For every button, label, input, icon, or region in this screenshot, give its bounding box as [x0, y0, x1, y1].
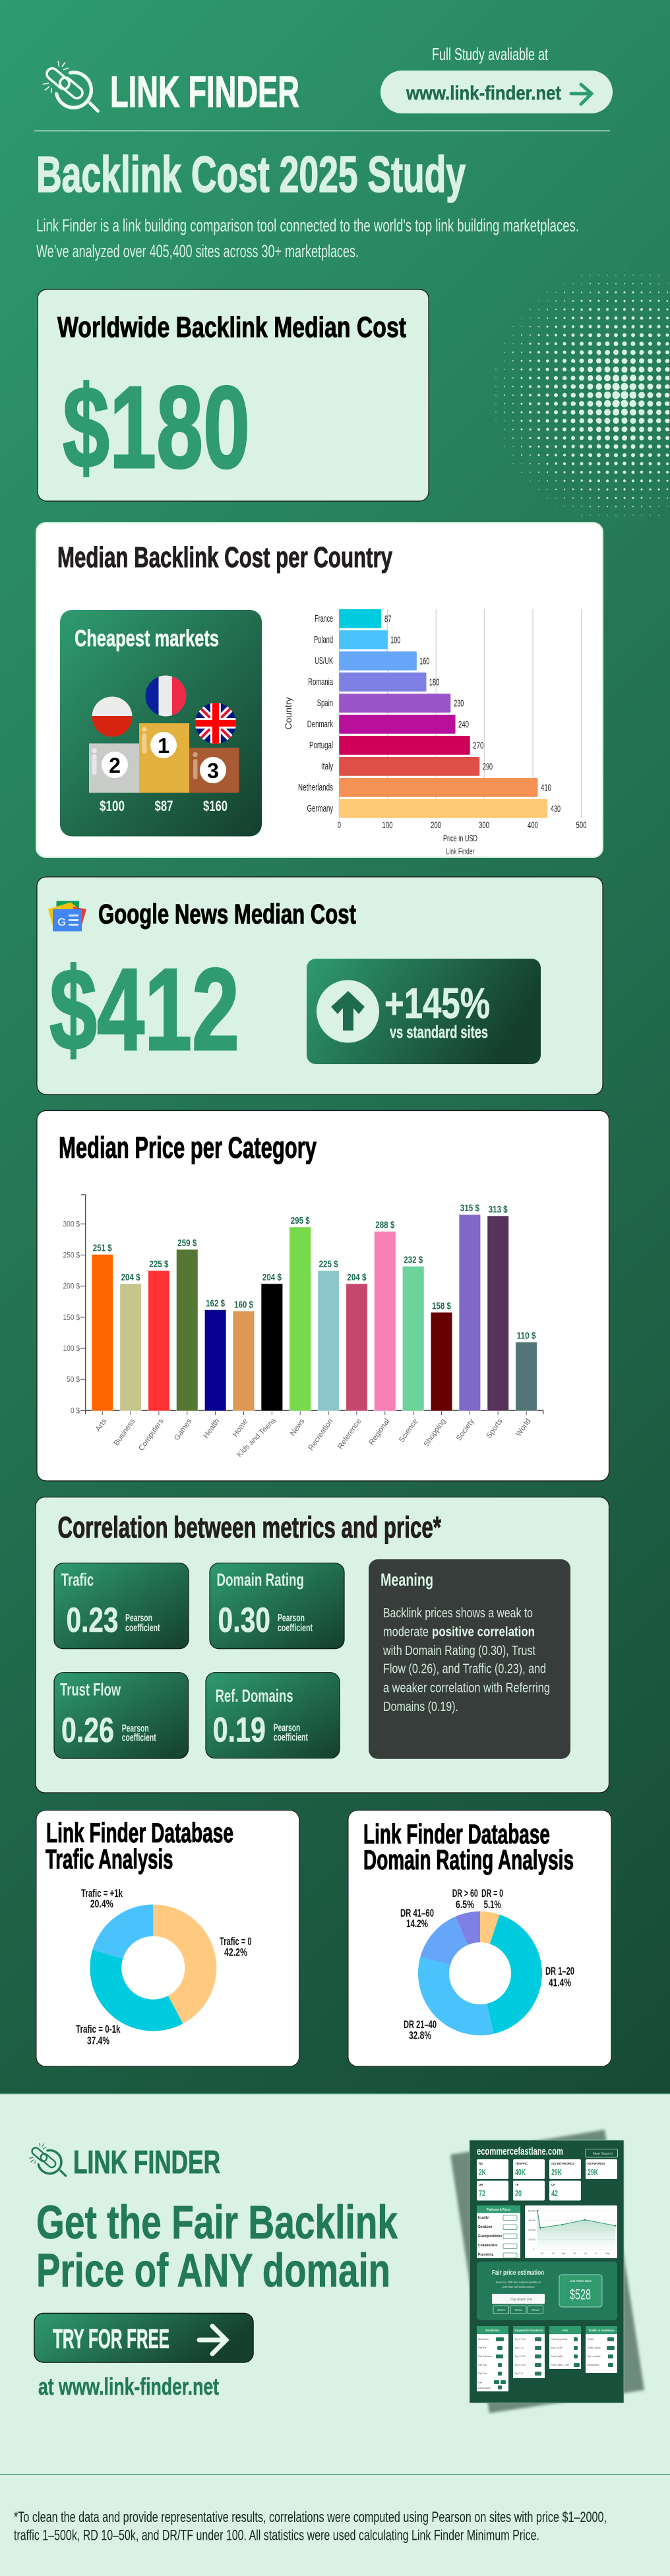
value labels: 160: [419, 655, 429, 667]
traffic line chart: 45,000: [528, 2219, 535, 2222]
value labels: 315 $: [460, 1203, 479, 1214]
button: try for free: TRY FOR FREE: [53, 2323, 169, 2354]
traffic line chart: 30,000: [528, 2229, 535, 2231]
bars: [92, 1214, 537, 1411]
donut labels: 20.4%: [90, 1898, 113, 1910]
big number: $180: [63, 362, 250, 493]
fair price estimation: Based on +100K sites analyzed available on: [496, 2281, 541, 2284]
explanation text: a weaker correlation with Referring: [383, 1681, 550, 1696]
bar chart: price per category: [63, 1195, 543, 1459]
platforms table: [477, 2205, 520, 2258]
metric card: ref domains: [206, 1673, 340, 1758]
traffic line chart: 60,000: [528, 2210, 535, 2213]
metric cards: CF: [551, 2183, 555, 2186]
y axis labels: 50 $: [67, 1375, 80, 1384]
y axis labels: 200 $: [63, 1282, 80, 1291]
explanation text: Flow (0.26), and Traffic (0.23), and: [383, 1662, 546, 1677]
category labels: Shopping: [423, 1418, 447, 1449]
x axis ticks: 0: [338, 820, 341, 830]
metric cards: 29K: [588, 2167, 598, 2177]
heading: Domain Rating Analysis: [363, 1844, 574, 1875]
y axis labels: 250 $: [63, 1250, 80, 1259]
search button: [586, 2149, 617, 2157]
country labels: [298, 613, 334, 814]
platforms table: Platforms & Prices: [487, 2208, 510, 2212]
traffic line chart: 24: [595, 2252, 597, 2255]
country labels: Poland: [314, 634, 333, 645]
platforms table: Icopify: [478, 2216, 489, 2220]
value labels: 251 $: [93, 1242, 112, 1254]
panel: median cost per country: [36, 523, 603, 857]
category labels: Games: [173, 1418, 194, 1442]
fair price estimation: Tweet: [514, 2308, 523, 2312]
value labels: 110 $: [517, 1331, 536, 1341]
donut labels: 6.5%: [456, 1898, 474, 1911]
country labels: Denmark: [307, 719, 333, 730]
detail tables: Keywords Positions: [514, 2329, 543, 2332]
website link: at www.link-finder.net: [38, 2373, 219, 2400]
donut chart: domain rating: [418, 1911, 542, 2035]
detail tables: Top Location: [587, 2355, 601, 2358]
donut labels: 42.2%: [224, 1946, 247, 1959]
footer logo: [30, 2143, 220, 2180]
heading: Worldwide Backlink Median Cost: [57, 311, 406, 344]
x axis ticks: 100: [382, 820, 393, 830]
donut labels: DR = 0: [481, 1887, 503, 1900]
detail tables: Top 4-10: [514, 2347, 524, 2349]
detail tables: Paid Keywords: [551, 2338, 567, 2341]
donut chart: trafic: [90, 1904, 216, 2031]
country labels: Romania: [308, 676, 333, 688]
value labels: 290: [483, 761, 493, 772]
detail tables: Paid Traffic Cost: [551, 2364, 570, 2366]
value labels: 204 $: [121, 1272, 140, 1283]
metric card: trust flow: 0.26: [61, 1711, 114, 1750]
traffic line chart: 15,000: [528, 2238, 535, 2241]
value labels: 430: [551, 803, 561, 814]
metric cards: [477, 2159, 617, 2201]
detail tables: Traffic Value: [587, 2347, 601, 2349]
fair price estimation: $528: [570, 2287, 591, 2303]
value labels: 288 $: [375, 1220, 395, 1231]
explanation text: [382, 1605, 550, 1714]
fair price estimation: LinkFinder with similar metrics.: [502, 2285, 535, 2289]
value labels: 87: [384, 613, 392, 624]
category labels: Science: [398, 1418, 419, 1444]
metric cards: #10 KEYWORDS: [551, 2162, 574, 2165]
value labels: 270: [473, 740, 484, 751]
category labels: Reference: [336, 1418, 363, 1451]
chart credit: Link Finder: [446, 847, 475, 856]
metric cards: 42: [551, 2188, 558, 2198]
x axis ticks: 200: [431, 820, 441, 830]
panel: trafic analysis: [36, 1811, 299, 2066]
category labels: News: [289, 1418, 307, 1437]
detail tables: Top 11-20: [514, 2355, 526, 2358]
value labels: 225 $: [319, 1259, 338, 1270]
donut labels: [76, 1887, 252, 2047]
category labels: World: [515, 1418, 532, 1438]
traffic line chart: [525, 2205, 617, 2258]
category labels: Computers: [137, 1418, 166, 1453]
horizontal bar chart: price per country: [283, 609, 587, 856]
y axis title: Country: [283, 697, 293, 730]
country labels: Italy: [321, 761, 334, 772]
detail tables: Languages: [587, 2364, 599, 2366]
donut labels: 37.4%: [87, 2035, 109, 2047]
panel: worldwide median cost: [38, 289, 429, 501]
product screenshot: [450, 2130, 644, 2413]
value labels: 160 $: [234, 1299, 254, 1310]
podium first place: [139, 723, 189, 793]
donut labels: DR 41–60: [400, 1907, 434, 1919]
value labels: 180: [429, 676, 439, 688]
detail tables: Ref IPs: [478, 2347, 487, 2349]
country labels: US/UK: [315, 655, 333, 667]
detail tables: Top 3 Pos.: [514, 2338, 526, 2341]
metric cards: DR: [479, 2183, 483, 2186]
metric card: trust flow: Trust Flow: [60, 1680, 121, 1700]
title: Backlink Cost 2025 Study: [36, 146, 466, 203]
logo wordmark: LINK FINDER: [73, 2145, 220, 2180]
category labels: Recreation: [307, 1418, 334, 1452]
platforms table: Guestpostlinks: [478, 2234, 502, 2238]
detail tables: Top 51+: [514, 2372, 524, 2375]
donut labels: DR > 60: [452, 1887, 478, 1900]
heading: Cheapest markets: [75, 626, 219, 651]
comparison note: vs standard sites: [390, 1022, 488, 1042]
detail tables: Backlinks: [485, 2329, 500, 2332]
explanation text: moderate: [383, 1625, 429, 1640]
value labels: 158 $: [432, 1300, 452, 1311]
category labels: Sports: [485, 1418, 504, 1440]
donut labels: [400, 1887, 574, 2042]
category labels: Society: [455, 1418, 476, 1443]
value labels: 259 $: [177, 1238, 197, 1249]
heading: [46, 1817, 233, 1874]
caption: Full Study avaliable at: [432, 44, 549, 64]
icon: flag UK: [195, 702, 237, 744]
metric card: trafic: Pearson: [125, 1613, 152, 1624]
podium prices: $160: [203, 798, 228, 814]
fair price estimation: Link Finder Value: [570, 2279, 592, 2283]
heading: Trafic Analysis: [46, 1843, 173, 1874]
y axis labels: 150 $: [63, 1313, 80, 1322]
heading: Meaning: [381, 1570, 433, 1590]
category labels: Kids and Teens: [235, 1416, 278, 1459]
value labels: 225 $: [149, 1259, 169, 1270]
metric card: trust flow: coefficient: [122, 1733, 156, 1744]
donut labels: 14.2%: [406, 1917, 428, 1930]
category labels: Health: [202, 1418, 221, 1440]
explanation text: Backlink prices shows a weak to: [383, 1605, 533, 1621]
big number: $412: [49, 944, 239, 1075]
x axis ticks: 500: [576, 820, 587, 830]
podium prices: $100: [100, 798, 125, 814]
detail tables: Ref Edu: [478, 2364, 487, 2366]
podium third place: [189, 748, 239, 793]
category labels: [94, 1416, 532, 1459]
footnote: [14, 2509, 607, 2544]
panel: domain rating analysis: [348, 1811, 611, 2066]
traffic line chart: 16: [541, 2252, 543, 2255]
icon: flag Poland: [92, 696, 132, 737]
metric cards: TF: [515, 2183, 519, 2186]
icon: up arrow: [317, 980, 379, 1043]
podium second place: 2: [109, 754, 121, 777]
fair price estimation: Share: [497, 2308, 506, 2312]
y axis labels: 0 $: [71, 1406, 80, 1415]
icon: google news: G: [57, 916, 66, 928]
platforms table: GetaLink: [478, 2225, 493, 2229]
panel: call to action footer: [0, 2093, 670, 2576]
halftone dots decoration: [492, 266, 670, 524]
heading: Link Finder Database: [363, 1818, 550, 1849]
percentage: +145%: [384, 979, 490, 1027]
heading: Median Backlink Cost per Country: [57, 541, 392, 574]
explanation text: positive correlation: [432, 1625, 535, 1640]
call to action headline: Get the Fair Backlink: [36, 2197, 398, 2249]
callout: vs standard sites: [307, 959, 541, 1064]
call to action headline: [36, 2197, 398, 2297]
donut labels: 32.8%: [409, 2029, 431, 2042]
detail tables: Ref: [478, 2381, 483, 2384]
donut labels: Trafic = +1k: [81, 1887, 123, 1900]
y axis labels: [63, 1219, 80, 1415]
traffic line chart: 16: [584, 2252, 587, 2255]
url pill: [381, 71, 613, 113]
detail tables: Ads: [563, 2329, 568, 2332]
search button: New Search: [593, 2152, 613, 2156]
platforms table: Collaborator: [478, 2244, 498, 2248]
x axis title: Price in USD: [443, 833, 477, 843]
detail tables: Traffic & Audience: [588, 2329, 615, 2332]
donut labels: Trafic = 0-1k: [76, 2023, 121, 2035]
metric card: trafic: coefficient: [125, 1623, 160, 1634]
country labels: Spain: [317, 698, 333, 709]
fair price estimation: [477, 2261, 617, 2320]
x axis ticks: 400: [528, 820, 538, 830]
metric cards: 20: [515, 2188, 522, 2198]
detail tables: Traffic: [587, 2338, 594, 2341]
donut labels: DR 21–40: [404, 2018, 437, 2031]
country labels: France: [315, 613, 333, 624]
metric card: ref domains: Pearson: [274, 1723, 300, 1734]
icon: flag France: [145, 675, 187, 717]
value labels: 230: [454, 698, 464, 709]
detail tables: [477, 2326, 617, 2391]
value labels: 313 $: [489, 1204, 508, 1215]
call to action headline: Price of ANY domain: [36, 2245, 390, 2297]
y axis labels: 100 $: [63, 1344, 80, 1353]
heading: Link Finder Database: [46, 1817, 233, 1848]
country labels: Portugal: [309, 740, 333, 751]
metric cards: KEYWORDS: [588, 2162, 605, 2165]
metric cards: 40K: [515, 2167, 526, 2177]
detail tables: Backlinks: [478, 2338, 489, 2341]
icon: arrow: [199, 2326, 226, 2354]
explanation text: Domains (0.19).: [383, 1699, 458, 1714]
logo wordmark: LINK FINDER: [110, 67, 299, 117]
donut labels: 5.1%: [484, 1898, 501, 1911]
detail tables: Ref Subnets: [478, 2355, 492, 2358]
metric card: domain rating: Domain Rating: [216, 1570, 304, 1590]
detail tables: Languages: [478, 2387, 491, 2389]
intro text: We’ve analyzed over 405,400 sites across 30+ marketplaces.: [36, 241, 359, 261]
icon: arrow: [571, 84, 592, 104]
intro text: [36, 216, 579, 261]
header logo: [43, 61, 299, 117]
x axis ticks: 300: [479, 820, 489, 830]
platforms table: Prposting: [478, 2253, 493, 2257]
heading: [363, 1818, 574, 1875]
metric card: ref domains: Ref. Domains: [216, 1686, 293, 1706]
category labels: Business: [113, 1418, 137, 1447]
category labels: Regional: [368, 1418, 391, 1447]
panel: meaning: [369, 1559, 570, 1759]
detail tables: Ads Count: [551, 2347, 563, 2349]
fair price estimation: Fair price estimation: [492, 2269, 544, 2277]
metric card: ref domains: coefficient: [274, 1732, 308, 1743]
traffic line chart: 24: [552, 2252, 555, 2255]
metric cards: 72: [479, 2188, 485, 2198]
value labels: 232 $: [404, 1254, 423, 1266]
screenshot title: ecommercefastlane.com: [477, 2146, 563, 2157]
metric cards: RD: [479, 2162, 483, 2165]
value labels: 204 $: [262, 1272, 282, 1283]
heading: Google News Median Cost: [98, 899, 356, 930]
category labels: Arts: [94, 1418, 109, 1433]
metric card: trust flow: Pearson: [122, 1723, 149, 1735]
metric card: domain rating: Pearson: [278, 1613, 305, 1624]
donut labels: Trafic = 0: [220, 1935, 252, 1948]
button: try for free: [34, 2313, 253, 2362]
detail tables: Ref Gov: [478, 2372, 487, 2375]
category labels: Home: [231, 1418, 249, 1439]
metric card: trafic: [54, 1563, 189, 1649]
value labels: 204 $: [347, 1272, 367, 1283]
icon: google news: [48, 901, 86, 931]
fair price estimation: Copy Report Link: [510, 2298, 532, 2302]
value labels: 162 $: [206, 1298, 226, 1309]
value labels: 100: [390, 634, 400, 645]
traffic line chart: May: [605, 2252, 610, 2255]
podium third place: 3: [207, 759, 219, 783]
podium prices: [100, 798, 228, 814]
icon: link magnifier: [43, 61, 98, 111]
panel: median price per category: [37, 1110, 609, 1481]
panel: google news median cost: [37, 877, 603, 1094]
podium prices: $87: [154, 798, 173, 814]
metric card: domain rating: [210, 1563, 344, 1649]
metric card: trust flow: [54, 1673, 189, 1758]
heading: Correlation between metrics and price*: [58, 1511, 441, 1544]
panel: correlation between metrics and price: [36, 1497, 609, 1793]
detail tables: Paid Traffic: [551, 2355, 563, 2358]
metric card: ref domains: 0.19: [213, 1711, 266, 1750]
full study link: [381, 44, 613, 113]
metric card: domain rating: coefficient: [278, 1623, 313, 1634]
value labels: 295 $: [291, 1215, 310, 1226]
metric cards: 29K: [551, 2167, 562, 2177]
value labels: [384, 613, 561, 814]
value labels: [93, 1203, 536, 1341]
icon: link magnifier: [30, 2143, 66, 2176]
podium first place: 1: [158, 734, 169, 758]
donut labels: DR 1–20: [545, 1965, 574, 1977]
country labels: Germany: [307, 803, 334, 814]
value labels: 240: [458, 719, 469, 730]
heading: Median Price per Category: [59, 1131, 317, 1164]
metric card: trafic: Trafic: [61, 1570, 94, 1590]
bars: [339, 609, 547, 818]
donut labels: 41.4%: [549, 1977, 571, 1989]
metric card: domain rating: 0.30: [218, 1601, 270, 1640]
fair price estimation: Share: [532, 2308, 540, 2312]
country labels: Netherlands: [298, 782, 333, 793]
explanation text: with Domain Rating (0.30), Trust: [382, 1643, 535, 1658]
traffic line chart: Apr: [562, 2252, 566, 2255]
detail tables: Top 21-50: [514, 2364, 526, 2366]
url text: www.link-finder.net: [406, 82, 561, 104]
metric cards: 2K: [479, 2167, 486, 2177]
value labels: 410: [541, 782, 551, 793]
metric card: trafic: 0.23: [66, 1601, 119, 1640]
panel: cheapest markets: [60, 610, 262, 836]
traffic line chart: 0: [533, 2248, 534, 2251]
traffic line chart: 16: [573, 2252, 576, 2255]
x axis ticks: [338, 820, 587, 830]
podium second place: [89, 744, 139, 793]
metric cards: TRAFFIC: [515, 2162, 528, 2165]
y axis labels: 300 $: [63, 1219, 80, 1228]
